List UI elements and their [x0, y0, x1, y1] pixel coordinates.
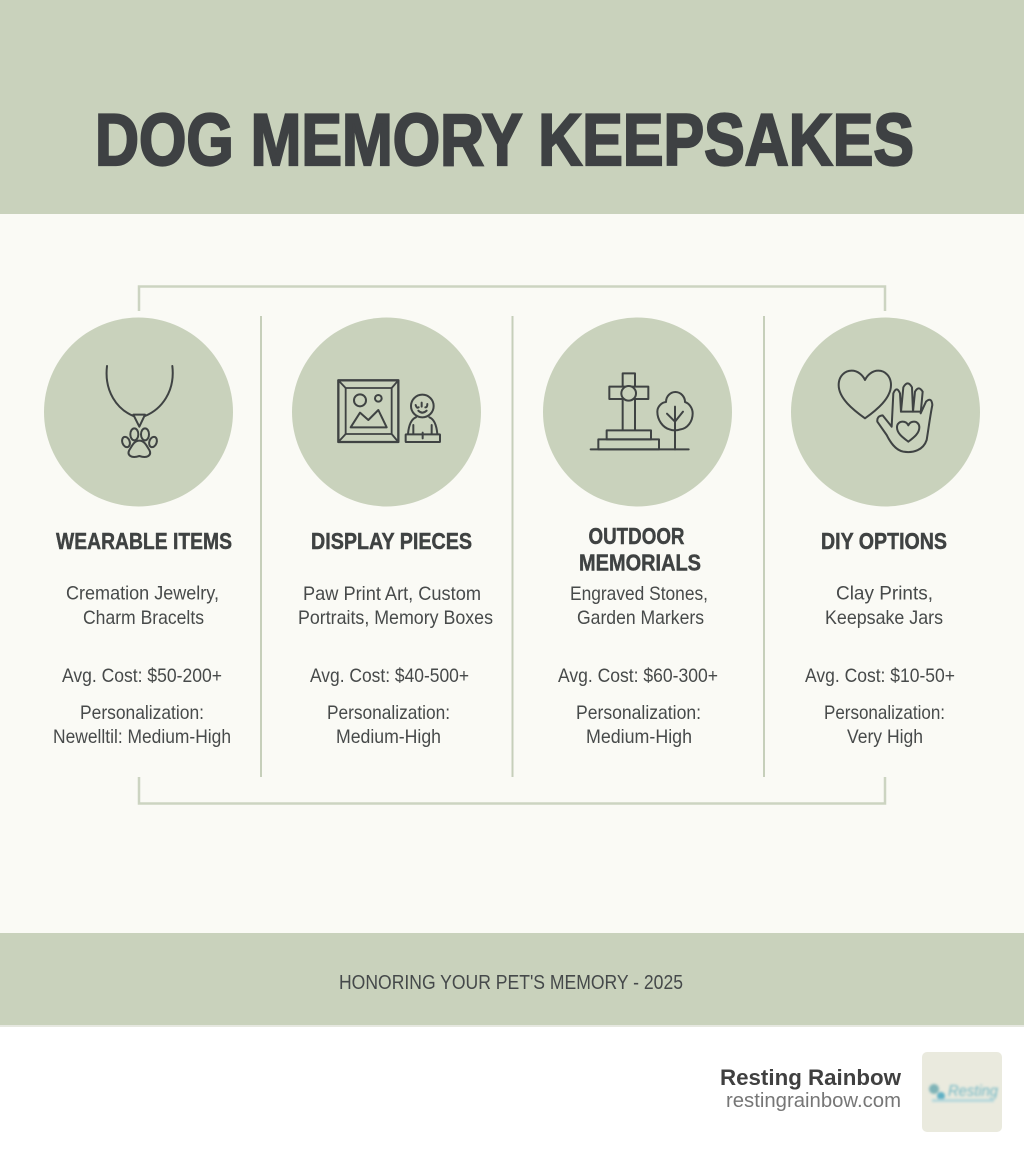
personalization: Personalization:: [576, 702, 701, 724]
personalization: [327, 702, 450, 748]
personalization: [53, 702, 231, 748]
header banner: [0, 0, 1024, 214]
logo: [922, 1052, 1002, 1132]
average cost: Avg. Cost: $60-300+: [558, 665, 718, 687]
heading: MEMORIALS: [579, 550, 701, 576]
personalization: [824, 702, 945, 748]
item list: [66, 582, 219, 629]
item list: [570, 583, 708, 629]
item list: Paw Print Art, Custom: [303, 583, 481, 605]
item list: Engraved Stones,: [570, 583, 708, 605]
item list: Charm Bracelts: [83, 607, 204, 629]
panel: outdoor memorials: [543, 318, 732, 748]
item list: [298, 583, 493, 629]
item list: Portraits, Memory Boxes: [298, 607, 493, 629]
icon circle: outdoor: [543, 318, 732, 506]
column dividers: [261, 316, 764, 777]
item list: Cremation Jewelry,: [66, 582, 219, 604]
personalization: Personalization:: [327, 702, 450, 724]
brand url: restingrainbow.com: [726, 1090, 901, 1112]
brand name: Resting Rainbow: [720, 1065, 902, 1090]
item list: Keepsake Jars: [825, 607, 943, 629]
panel: diy options: [791, 318, 980, 748]
personalization: Personalization:: [824, 702, 945, 724]
average cost: Avg. Cost: $50-200+: [62, 665, 222, 687]
personalization: Newelltil: Medium-High: [53, 726, 231, 748]
logo: Resting: [948, 1083, 998, 1100]
heading: DISPLAY PIECES: [311, 528, 472, 554]
icon: framed picture and figure: [338, 380, 440, 442]
personalization: Personalization:: [80, 702, 204, 724]
item list: Clay Prints,: [836, 582, 933, 604]
panel: display pieces: [292, 318, 493, 748]
average cost: Avg. Cost: $10-50+: [805, 665, 955, 687]
top bracket: [139, 286, 885, 311]
icon: heart and hand: [839, 371, 932, 452]
footer text: HONORING YOUR PET'S MEMORY - 2025: [339, 972, 683, 994]
heading: [579, 523, 701, 576]
icon circle: diy: [791, 318, 980, 506]
item list: Garden Markers: [577, 607, 704, 629]
icon circle: display: [292, 318, 481, 506]
icon: cross on steps and tree: [591, 373, 693, 449]
panel: wearable items: [44, 318, 233, 748]
bottom bracket: [139, 777, 885, 804]
heading: OUTDOOR: [588, 523, 685, 549]
personalization: Medium-High: [336, 726, 441, 748]
icon circle: wearable: [44, 318, 233, 506]
personalization: Medium-High: [586, 726, 692, 748]
heading: WEARABLE ITEMS: [56, 528, 232, 554]
footer band: [0, 933, 1024, 1027]
personalization: Very High: [847, 726, 923, 748]
heading: DIY OPTIONS: [821, 528, 947, 554]
personalization: [576, 702, 701, 748]
average cost: Avg. Cost: $40-500+: [310, 665, 469, 687]
item list: [825, 582, 943, 629]
icon: necklace with paw pendant: [107, 366, 173, 457]
